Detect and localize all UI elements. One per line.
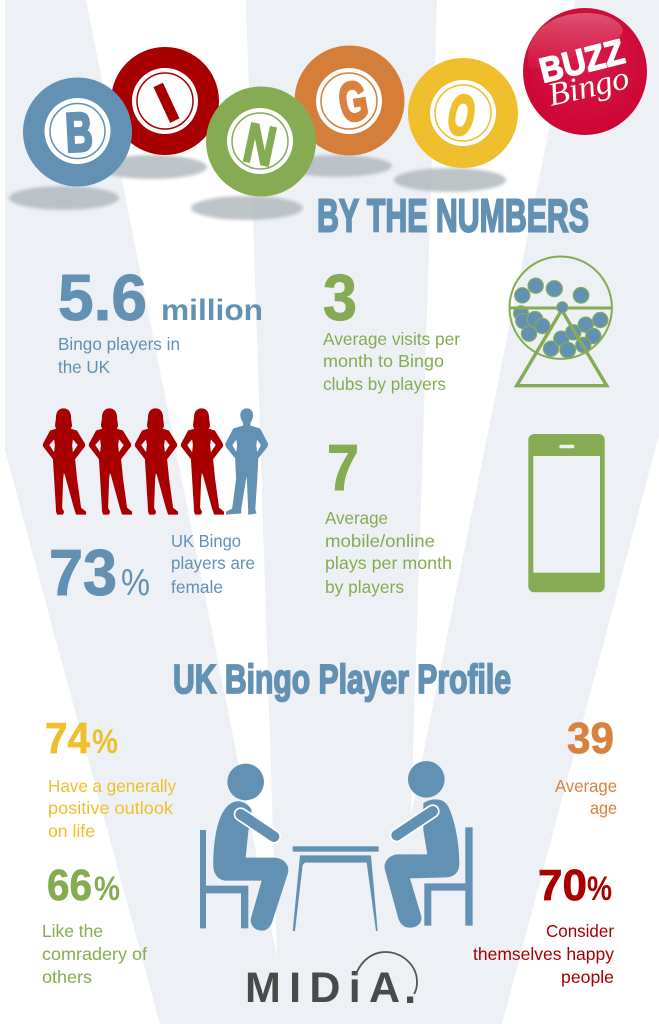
stat: 66% comradery: Like the xyxy=(42,921,103,941)
stat: 39 average age: age xyxy=(590,798,617,818)
stat: 70% happy: Consider xyxy=(546,921,614,941)
stat: 66% comradery: 66 xyxy=(47,861,92,910)
icon: woman 2 xyxy=(90,409,132,514)
stat: 7 mobile plays: Average xyxy=(325,508,388,528)
stat: 7 mobile plays: plays per month xyxy=(325,553,452,573)
stat: 70% happy: people xyxy=(561,967,614,987)
ball: I: I xyxy=(146,72,187,135)
stat: 7 mobile plays xyxy=(325,431,452,597)
stat: 66% comradery xyxy=(42,861,147,987)
stat: 3 visits per month xyxy=(323,261,460,394)
stat: 70% happy: themselves happy xyxy=(473,944,614,964)
icon: smartphone xyxy=(528,434,605,592)
stat: 5.6 million players: million xyxy=(161,294,263,327)
ball: G xyxy=(294,46,404,156)
ball: N: N xyxy=(239,113,281,178)
stat: 70% happy xyxy=(473,861,614,987)
Buzz Bingo logo: Bingo xyxy=(545,60,633,114)
ball: I xyxy=(111,47,219,155)
icon: woman 3 xyxy=(136,409,178,514)
stat: 3 visits per month: clubs by players xyxy=(323,374,446,394)
Buzz Bingo logo xyxy=(523,8,647,135)
stat: 70% happy: 70 xyxy=(538,861,587,910)
left person xyxy=(213,764,288,931)
stat: 73% female xyxy=(49,531,255,609)
stat: 39 average age: Average xyxy=(555,776,617,796)
MIDiA logo: MIDiA xyxy=(245,964,400,1012)
ball: O xyxy=(408,58,518,168)
right person xyxy=(385,761,459,928)
stat: 74% positive outlook: % xyxy=(92,723,118,761)
ball: G: G xyxy=(334,69,372,134)
stat: 5.6 million players: Bingo players in xyxy=(58,334,180,354)
stat: 7 mobile plays: 7 xyxy=(327,431,359,504)
stat: 3 visits per month: month to Bingo xyxy=(323,351,444,371)
stat: 66% comradery: others xyxy=(42,967,92,987)
stat: 66% comradery: % xyxy=(94,870,120,908)
stat: 66% comradery: comradery of xyxy=(42,944,147,964)
stat: 5.6 million players: 5.6 xyxy=(58,261,147,334)
stat: 3 visits per month: Average visits per xyxy=(323,329,460,349)
ball: N xyxy=(206,86,316,196)
stat: 7 mobile plays: by players xyxy=(325,577,404,597)
MIDiA logo: . xyxy=(404,964,416,1013)
illustration: two players at a table xyxy=(200,761,473,931)
stat: 74% positive outlook xyxy=(45,714,176,841)
Buzz Bingo logo: BUZZ xyxy=(536,32,628,91)
stat: 74% positive outlook: on life xyxy=(48,821,95,841)
icon: woman 1 xyxy=(44,409,86,514)
right chair xyxy=(424,827,473,926)
stat: 39 average age: 39 xyxy=(567,714,614,763)
icon: man xyxy=(226,409,268,514)
stat: 73% female: 73 xyxy=(49,536,117,609)
stat: 5.6 million players xyxy=(58,261,263,377)
ball: B: B xyxy=(64,100,94,163)
stat: 73% female: female xyxy=(171,577,223,597)
stat: 73% female: UK Bingo xyxy=(171,531,241,551)
stat: 3 visits per month: 3 xyxy=(323,261,357,334)
stat: 74% positive outlook: 74 xyxy=(45,714,90,763)
stat: 7 mobile plays: mobile/online xyxy=(325,531,435,551)
ball: B xyxy=(23,78,132,186)
stat: 74% positive outlook: positive outlook xyxy=(48,798,173,818)
heading: UK bingo player profile: UK Bingo Player Profile xyxy=(173,656,511,702)
left chair xyxy=(200,830,248,928)
ball shadows xyxy=(9,155,506,220)
icon: bingo ball machine xyxy=(510,256,612,386)
ball: O: O xyxy=(442,81,481,149)
bingo balls header xyxy=(9,46,518,220)
icon: people silhouettes xyxy=(44,409,268,514)
stat: 74% positive outlook: Have a generally xyxy=(48,776,176,796)
stat: 39 average age xyxy=(555,714,617,818)
stat: 73% female: players are xyxy=(171,553,255,573)
stat: 5.6 million players: the UK xyxy=(58,357,110,377)
stat: 73% female: % xyxy=(121,562,150,604)
table xyxy=(293,846,379,931)
stat: 70% happy: % xyxy=(587,870,612,908)
icon: woman 4 xyxy=(182,409,224,514)
